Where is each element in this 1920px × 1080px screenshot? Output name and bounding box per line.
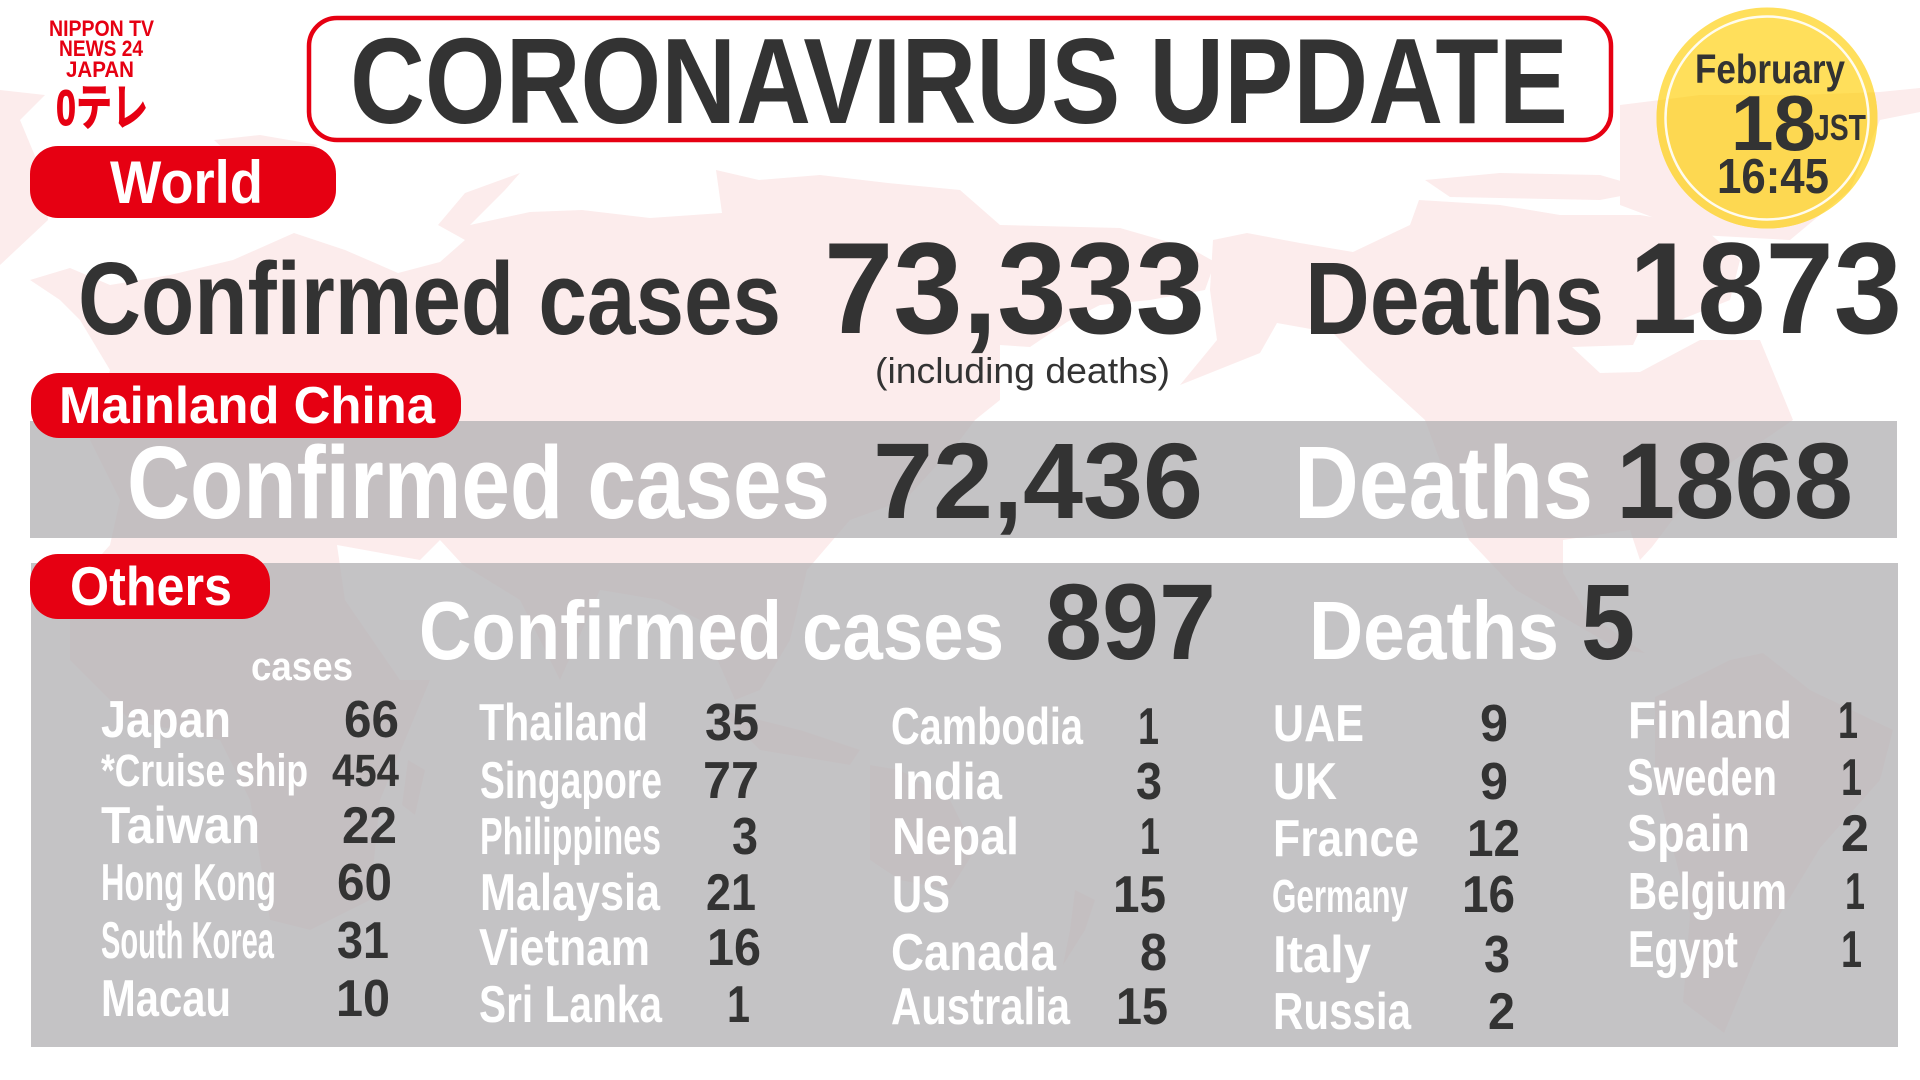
country column 1: Taiwan — [101, 797, 260, 855]
country column 4: UAE — [1273, 695, 1364, 753]
country column 3: Nepal — [892, 808, 1019, 866]
country column 4: Germany — [1272, 870, 1408, 922]
others totals — [419, 561, 1635, 682]
logo: Nippon TV News 24 Japan: NIPPON TV — [49, 16, 154, 41]
country column 3 — [891, 698, 1168, 1036]
country column 3: 15 — [1113, 866, 1166, 924]
others totals: 897 — [1045, 561, 1216, 682]
section label: World: World — [110, 149, 263, 216]
country column 4: Russia — [1273, 983, 1412, 1041]
panel: mainland china band — [30, 421, 1897, 538]
country column 2: 35 — [705, 694, 759, 752]
world totals — [78, 215, 1902, 361]
country column 1: *Cruise ship — [101, 745, 308, 796]
mainland china totals: 72,436 — [873, 420, 1203, 541]
country column 5 — [1627, 692, 1869, 979]
note: including deaths: (including deaths) — [875, 350, 1170, 391]
logo: Nippon TV News 24 Japan: NEWS 24 — [59, 36, 144, 61]
country column 1: 60 — [337, 854, 392, 912]
country column 4: 2 — [1488, 983, 1515, 1041]
country column 1: 31 — [337, 912, 389, 970]
country column 3: 1 — [1138, 698, 1159, 756]
country column 4: UK — [1273, 753, 1337, 811]
country column 2: Malaysia — [480, 864, 661, 922]
country column 2: Vietnam — [479, 919, 650, 977]
country column 1 — [101, 691, 399, 1028]
date badge: 16:45 — [1717, 150, 1829, 204]
date badge: JST — [1814, 107, 1866, 148]
panel: others — [31, 563, 1898, 1047]
logo: Nippon TV News 24 Japan: 0テレ — [56, 80, 148, 136]
others totals: Confirmed cases — [419, 584, 1004, 677]
country column 3: India — [892, 753, 1003, 811]
country column 1: 454 — [332, 745, 399, 796]
logo: Nippon TV News 24 Japan — [49, 16, 154, 136]
country column 1: Hong Kong — [101, 854, 276, 912]
country column 2: Singapore — [480, 752, 662, 810]
country column 5: 1 — [1841, 921, 1862, 979]
country column 2: 77 — [703, 752, 759, 810]
country column 3: Canada — [891, 924, 1057, 982]
country column 2: 1 — [727, 976, 750, 1034]
country column 5: Belgium — [1628, 863, 1787, 921]
country column 4: 3 — [1484, 926, 1510, 984]
section label: Others: Others — [70, 555, 232, 617]
country column 4 — [1272, 695, 1520, 1041]
country column 2: 21 — [706, 864, 756, 922]
date badge: February — [1695, 46, 1845, 92]
country column 1: 66 — [344, 691, 399, 749]
country column 5: 2 — [1841, 805, 1869, 863]
country column 3: 3 — [1136, 753, 1162, 811]
mainland china totals: Deaths — [1294, 425, 1593, 540]
country column 1: Macau — [101, 970, 231, 1028]
country column 1: Japan — [101, 691, 231, 749]
country column 4: Italy — [1273, 926, 1371, 984]
country column 3: 15 — [1116, 978, 1168, 1036]
mainland china totals: 1868 — [1616, 420, 1853, 541]
country column 3: 1 — [1140, 808, 1160, 866]
others totals: 5 — [1581, 561, 1635, 682]
country column 1: 22 — [342, 797, 397, 855]
country column 3: Australia — [891, 978, 1071, 1036]
cases column heading: cases — [251, 645, 353, 689]
country column 5: 1 — [1845, 863, 1865, 921]
country column 4: France — [1273, 810, 1419, 868]
country column 3: US — [892, 866, 950, 924]
mainland china totals: Confirmed cases — [127, 425, 830, 540]
country column 4: 9 — [1480, 753, 1508, 811]
country column 5: Finland — [1628, 692, 1792, 750]
country column 2: 16 — [707, 919, 761, 977]
world totals: 1873 — [1629, 215, 1902, 361]
date badge — [1656, 8, 1878, 228]
country column 2: Philippines — [480, 808, 661, 866]
country column 4: 12 — [1467, 810, 1520, 868]
country column 2: 3 — [732, 808, 758, 866]
country column 3: Cambodia — [891, 698, 1084, 756]
country column 4: 9 — [1480, 695, 1508, 753]
others totals: Deaths — [1309, 584, 1559, 677]
country column 5: Egypt — [1628, 921, 1738, 979]
logo: Nippon TV News 24 Japan: JAPAN — [66, 57, 134, 82]
country column 4: 16 — [1462, 866, 1515, 924]
world totals: Deaths — [1305, 241, 1604, 356]
country column 1: South Korea — [101, 912, 275, 970]
world totals: Confirmed cases — [78, 241, 781, 356]
country column 3: 8 — [1140, 924, 1167, 982]
country column 2: Thailand — [479, 694, 648, 752]
section label: World — [30, 146, 336, 218]
country column 5: 1 — [1841, 749, 1862, 807]
country column 2: Sri Lanka — [479, 976, 663, 1034]
country column 5: Sweden — [1627, 749, 1777, 807]
section label: Mainland China: Mainland China — [59, 377, 436, 435]
mainland china totals — [127, 420, 1853, 541]
country column 5: Spain — [1627, 805, 1750, 863]
country column 5: 1 — [1838, 692, 1858, 750]
country column 1: 10 — [336, 970, 390, 1028]
date badge: 18 — [1731, 79, 1816, 167]
title box: CORONAVIRUS UPDATE — [350, 13, 1568, 149]
country column 2 — [479, 694, 761, 1034]
world totals: 73,333 — [824, 215, 1205, 361]
